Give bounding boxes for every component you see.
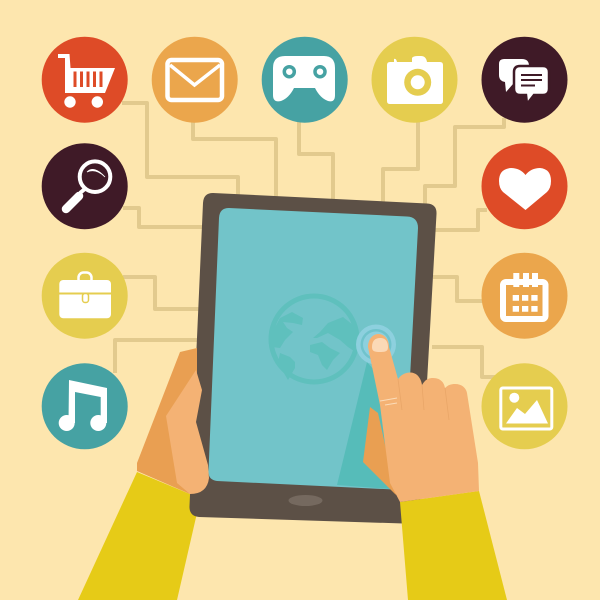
icon: camera — [372, 37, 458, 123]
icon: picture — [482, 363, 568, 449]
right hand — [363, 334, 507, 600]
icon: magnifying glass — [42, 143, 128, 229]
icon: music note — [42, 363, 128, 449]
globe icon — [271, 296, 358, 382]
knuckle creases — [380, 398, 397, 405]
left fingers — [166, 370, 209, 494]
tablet screen — [208, 208, 418, 490]
left hand — [137, 348, 209, 494]
icon: shopping cart — [42, 37, 128, 123]
touch ripple — [356, 324, 396, 364]
right sleeve — [400, 491, 507, 600]
icon: briefcase — [42, 253, 128, 339]
icon: calendar — [482, 253, 568, 339]
icon: game controller — [262, 37, 348, 123]
icon: mail envelope — [152, 37, 238, 123]
icon: heart — [482, 143, 568, 229]
finger details — [398, 379, 449, 420]
right thumb — [363, 407, 396, 495]
screen shadow — [337, 362, 404, 490]
home button — [288, 495, 322, 506]
tablet — [189, 193, 437, 524]
icon: chat bubbles — [482, 37, 568, 123]
connector lines — [115, 103, 504, 377]
left palm shadow — [137, 348, 197, 494]
tablet body — [189, 193, 437, 524]
left sleeve — [78, 472, 197, 600]
fingernail — [372, 338, 388, 352]
pointing hand — [368, 334, 479, 502]
